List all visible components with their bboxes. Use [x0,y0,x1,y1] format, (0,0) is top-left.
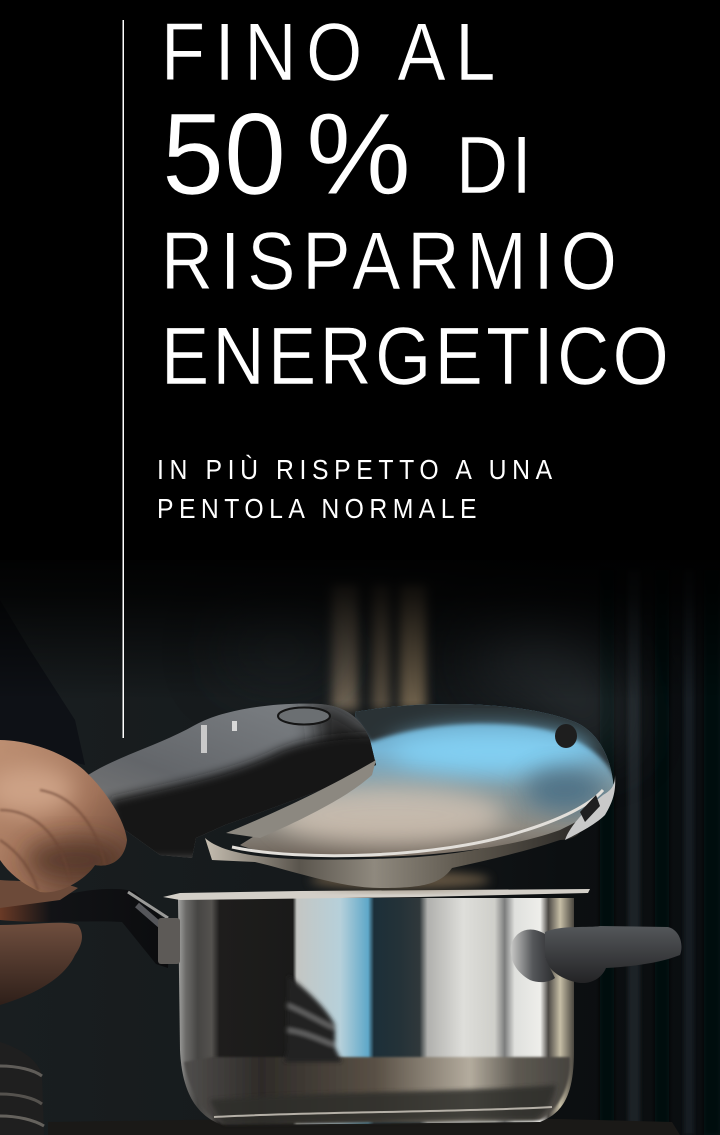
finger creases [0,790,105,890]
right side handle [511,926,682,983]
stove top [48,1119,680,1135]
lid lower bright edge [232,790,603,856]
handle brand mark [232,721,237,731]
subtitle [157,454,553,524]
title line 2: 50 % DI: 50 [162,89,286,219]
title line 2: 50 % DI: DI [456,120,532,211]
hand holding the handle [0,740,127,1005]
lid underside flange [205,820,581,888]
lid handle [88,695,385,860]
lid dark top edge [355,704,613,781]
inner reflected knob [284,975,342,1062]
curtain stripes on right [600,570,720,1135]
jacket sleeve [0,600,85,765]
base line [214,1107,552,1117]
stacked pot at lower left [0,1042,44,1135]
lid dome [240,704,614,857]
title line 3: RISPARMIO [161,216,617,307]
left pot handle [0,889,180,968]
title line 2: 50 % DI: % [306,89,411,219]
handle lower dark section [108,735,385,860]
lower dark band of pot [210,1085,556,1124]
pressure cooker pot [0,889,682,1125]
vertical rule [122,20,124,738]
handle dark right shade [292,704,376,766]
lid [205,700,620,889]
upper hand [0,740,127,892]
steam over lid [275,785,505,845]
photo background: dark kitchen scene [0,540,720,1135]
title line 1: FINO AL [161,7,495,98]
bright blue highlight [390,730,590,774]
pot body [178,898,574,1125]
title line 4: ENERGETICO [161,311,669,402]
pot rim [163,889,590,900]
title line 2: 50 % DI [162,89,532,219]
handle chrome strip [226,760,376,838]
lower hand [0,923,82,1005]
subtitle: PENTOLA NORMALE [157,493,477,524]
pot bottom reflection [184,1057,570,1124]
handle button [278,708,330,724]
warm glow under lid [310,871,490,889]
warm blurred stripes behind lid [332,585,426,710]
skin shadow [25,838,125,882]
title [161,7,669,402]
lid knob [555,724,577,748]
steam haze [220,618,625,750]
fade from black [0,540,720,700]
lid right chrome edge [565,775,615,840]
skin highlight [0,765,75,815]
subtitle: IN PIÙ RISPETTO A UNA [157,454,553,485]
